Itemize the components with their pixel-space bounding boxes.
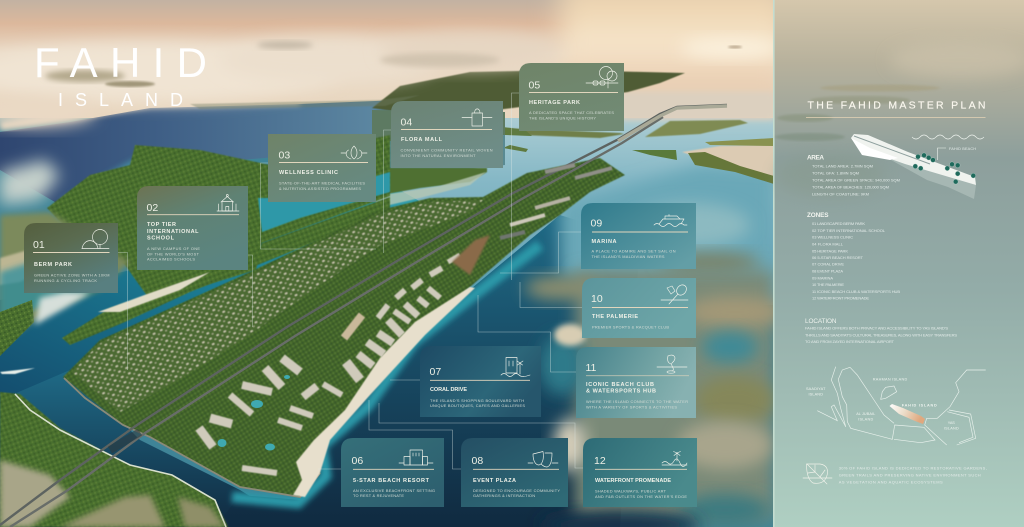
panel 11: beach club: & WATERSPORTS HUB (586, 388, 656, 394)
panel 09: marina: A PLACE TO ADMIRE AND SET SAIL ON (592, 248, 676, 254)
panel 01: berm park: RUNNING & CYCLING TRACK (34, 278, 97, 283)
panel 06: beach resort: 06 (352, 455, 363, 467)
panel 07: coral drive (420, 346, 541, 417)
panel 04: flora mall: 04 (400, 116, 412, 128)
icon: school (217, 194, 239, 211)
connector lines (118, 93, 583, 469)
logo: ISLAND (58, 90, 183, 110)
logo (34, 39, 207, 110)
panel 03: wellness clinic: WELLNESS CLINIC (279, 170, 338, 176)
icon: shopping bag (462, 109, 492, 126)
panel 12: waterfront promenade: AND F&B OUTLETS ON THE WATER'S EDGE (595, 494, 687, 499)
panel 01: berm park: 01 (33, 239, 45, 251)
panel 07: coral drive: THE ISLAND'S SHOPPING BOULEVARD WITH (430, 398, 524, 403)
panel 05: heritage park: THE ISLAND'S UNIQUE HISTORY (529, 116, 596, 120)
panel 04: flora mall: INTO THE NATURAL ENVIRONMENT (400, 153, 476, 158)
panel 08: event plaza (461, 438, 568, 507)
panel 01: berm park (24, 223, 118, 293)
zones list: 09 MARINA (812, 275, 833, 280)
icon: tree and hill (82, 230, 109, 248)
zones list: 04 FLORA MALL (812, 241, 844, 246)
panel 05: heritage park (519, 63, 624, 131)
zones list: 10 THE PALMERIE (812, 282, 844, 287)
icon: leaf (803, 464, 832, 484)
zones list: 05 HERITAGE PARK (812, 248, 848, 253)
master plan heading: THE FAHID MASTER PLAN (808, 100, 986, 112)
panel 04: flora mall: CONVENIENT COMMUNITY RETAIL WOVEN (400, 148, 493, 152)
icon: boat (654, 214, 687, 226)
island key map (851, 134, 984, 199)
panel 02: international school: ACCLAIMED SCHOOLS (147, 257, 195, 262)
panel 09: marina (581, 203, 696, 269)
location text (805, 318, 957, 344)
island key map: FAHID BEACH (949, 147, 976, 151)
panel 09: marina: MARINA (592, 239, 617, 245)
mangrove islands (47, 135, 390, 300)
location text: LOCATION (805, 318, 837, 325)
panel 04: flora mall (391, 101, 503, 168)
area facts: TOTAL AREA OF BEACHES: 120,000 SQM (812, 185, 889, 190)
zones list: 03 WELLNESS CLINIC (812, 235, 853, 240)
panel 07: coral drive: CORAL DRIVE (430, 387, 467, 393)
location map: AL JUBAIL (856, 412, 875, 416)
icon: palm on island (662, 452, 687, 466)
cloud layer (0, 32, 780, 126)
area facts: TOTAL AREA OF GREEN SPACE: 940,000 SQM (812, 178, 900, 183)
icon: lotus (341, 146, 367, 159)
panel 06: beach resort: AN EXCLUSIVE BEACHFRONT SETTING (353, 488, 435, 493)
panel 02: international school: A NEW CAMPUS OF ONE (147, 246, 200, 251)
panel 08: event plaza: GATHERINGS & INTERACTION (473, 493, 535, 498)
panel 07: coral drive: 07 (430, 366, 441, 378)
panel 06: beach resort: TO REST & REJUVENATE (353, 493, 404, 498)
panel 02: international school: SCHOOL (147, 236, 175, 242)
panel 03: wellness clinic: 03 (278, 150, 290, 162)
panel 05: heritage park: A DEDICATED SPACE THAT CELEBRATES (529, 110, 614, 115)
sustainability note (839, 466, 987, 484)
panel 11: beach club: 11 (586, 362, 597, 374)
panel 02: international school: TOP TIER (147, 222, 176, 228)
panel 11: beach club: ICONIC BEACH CLUB (586, 382, 654, 388)
location map: SAADIYAT (806, 387, 826, 391)
panel 08: event plaza: DESIGNED TO ENCOURAGE COMMUNITY (473, 488, 560, 493)
panel 09: marina: THE ISLAND'S MALDIVIAN WATERS (592, 254, 665, 259)
highway and bridges (0, 105, 727, 527)
panel 11: beach club (576, 347, 696, 418)
location text: TO AND FROM ZAYED INTERNATIONAL AIRPORT (805, 339, 895, 344)
panel 12: waterfront promenade: 12 (594, 455, 606, 467)
panel 08: event plaza: 08 (472, 455, 483, 467)
zones list: 02 TOP TIER INTERNATIONAL SCHOOL (812, 228, 886, 233)
zones list (807, 212, 900, 301)
panel 02: international school (137, 186, 248, 270)
icon: rackets (661, 283, 688, 304)
location text: THRILLS AND SAADIYAT'S CULTURAL TREASURES, ALONG WITH EASY TRANSFERS (805, 332, 957, 338)
icon: trees (586, 66, 618, 88)
panel 10: the palmerie: THE PALMERIE (592, 314, 638, 320)
panel 10: the palmerie: PREMIER SPORTS & RACQUET CLUB (592, 324, 669, 330)
panel 01: berm park: BERM PARK (34, 262, 72, 268)
sustainability note: 30% OF FAHID ISLAND IS DEDICATED TO RESTORATIVE GARDENS, (839, 466, 987, 470)
zones list: 11 ICONIC BEACH CLUB & WATERSPORTS HUB (812, 289, 900, 294)
panel 02: international school: 02 (146, 202, 158, 214)
zones list: 08 EVENT PLAZA (812, 269, 843, 274)
panel 06: beach resort (341, 438, 444, 507)
location map: ISLAND (808, 392, 823, 396)
main island (63, 158, 625, 497)
area facts: TOTAL GFA: 1.8MN SQM (812, 171, 859, 176)
panel 02: international school: INTERNATIONAL (147, 229, 199, 235)
panel 03: wellness clinic: & NUTRITION-ASSISTED PROGRAMMES (279, 186, 361, 191)
panel 01: berm park: GREEN ACTIVE ZONE WITH A 10KM (34, 272, 110, 278)
location map: ISLAND (944, 427, 959, 431)
sustainability note: AS VEGETATION AND AQUATIC ECOSYSTEMS (839, 480, 943, 484)
zones list: 06 5-STAR BEACH RESORT (812, 255, 864, 260)
logo: FAHID (34, 39, 207, 86)
area facts: TOTAL LAND AREA: 2.7MN SQM (812, 164, 873, 169)
aerial background (0, 0, 790, 527)
zones list: ZONES (807, 212, 829, 219)
panel 05: heritage park: 05 (528, 80, 540, 92)
location map: YAS (948, 421, 955, 425)
sustainability note: GREEN TRAILS AND PRESERVING NATIVE ENVIRONMENT SUCH (839, 472, 981, 478)
area facts (807, 154, 900, 197)
panel 11: beach club: WHERE THE ISLAND CONNECTS TO THE WATER (586, 399, 688, 404)
panel 07: coral drive: UNIQUE BOUTIQUES, CAFES AND GALLERIES (430, 403, 525, 408)
icon: hotel (399, 450, 433, 465)
panel 03: wellness clinic (268, 134, 376, 202)
right information panel (773, 0, 1024, 527)
icon: theatre masks (528, 452, 558, 467)
panel 12: waterfront promenade (583, 438, 697, 507)
icon: kitesurfer (657, 355, 687, 373)
area facts: LENGTH OF COASTLINE: 9KM (812, 192, 869, 197)
panel 12: waterfront promenade: WATERFRONT PROMENADE (595, 478, 671, 484)
panel 09: marina: 09 (590, 218, 602, 230)
panel 12: waterfront promenade: SHADED WALKWAYS, PUBLIC ART (595, 488, 667, 494)
resort and residential buildings (199, 255, 460, 473)
far mangroves and sand (372, 70, 685, 112)
panel 10: the palmerie: 10 (591, 293, 603, 305)
zones list: 01 LANDSCAPED BERM PARK (812, 221, 865, 226)
zones list: 07 CORAL DRIVE (812, 262, 844, 267)
lower-left land (0, 392, 228, 527)
panel 03: wellness clinic: STATE-OF-THE-ART MEDICAL FACILITIES (279, 180, 365, 186)
location map: RAHMAN ISLAND (873, 378, 908, 382)
panel 05: heritage park: HERITAGE PARK (529, 100, 580, 106)
panel 10: the palmerie (582, 278, 696, 338)
beach (293, 287, 475, 497)
area facts: AREA (807, 154, 824, 162)
panel 06: beach resort: 5-STAR BEACH RESORT (353, 478, 430, 484)
panel 11: beach club: WITH A VARIETY OF SPORTS & ACTIVITIES (586, 404, 677, 410)
panel 04: flora mall: FLORA MALL (401, 137, 443, 143)
zones list: 12 WATERFRONT PROMENADE (812, 296, 869, 301)
location text: FAHID ISLAND OFFERS BOTH PRIVACY AND ACCESSIBILITY TO YAS ISLAND'S (805, 326, 948, 330)
panel 08: event plaza: EVENT PLAZA (473, 478, 516, 484)
location map: ISLAND (858, 417, 873, 421)
panel 02: international school: OF THE WORLD'S MOST (147, 251, 200, 256)
location map (806, 367, 986, 445)
location map: FAHID ISLAND (902, 404, 937, 408)
icon: building and palm (501, 358, 530, 376)
